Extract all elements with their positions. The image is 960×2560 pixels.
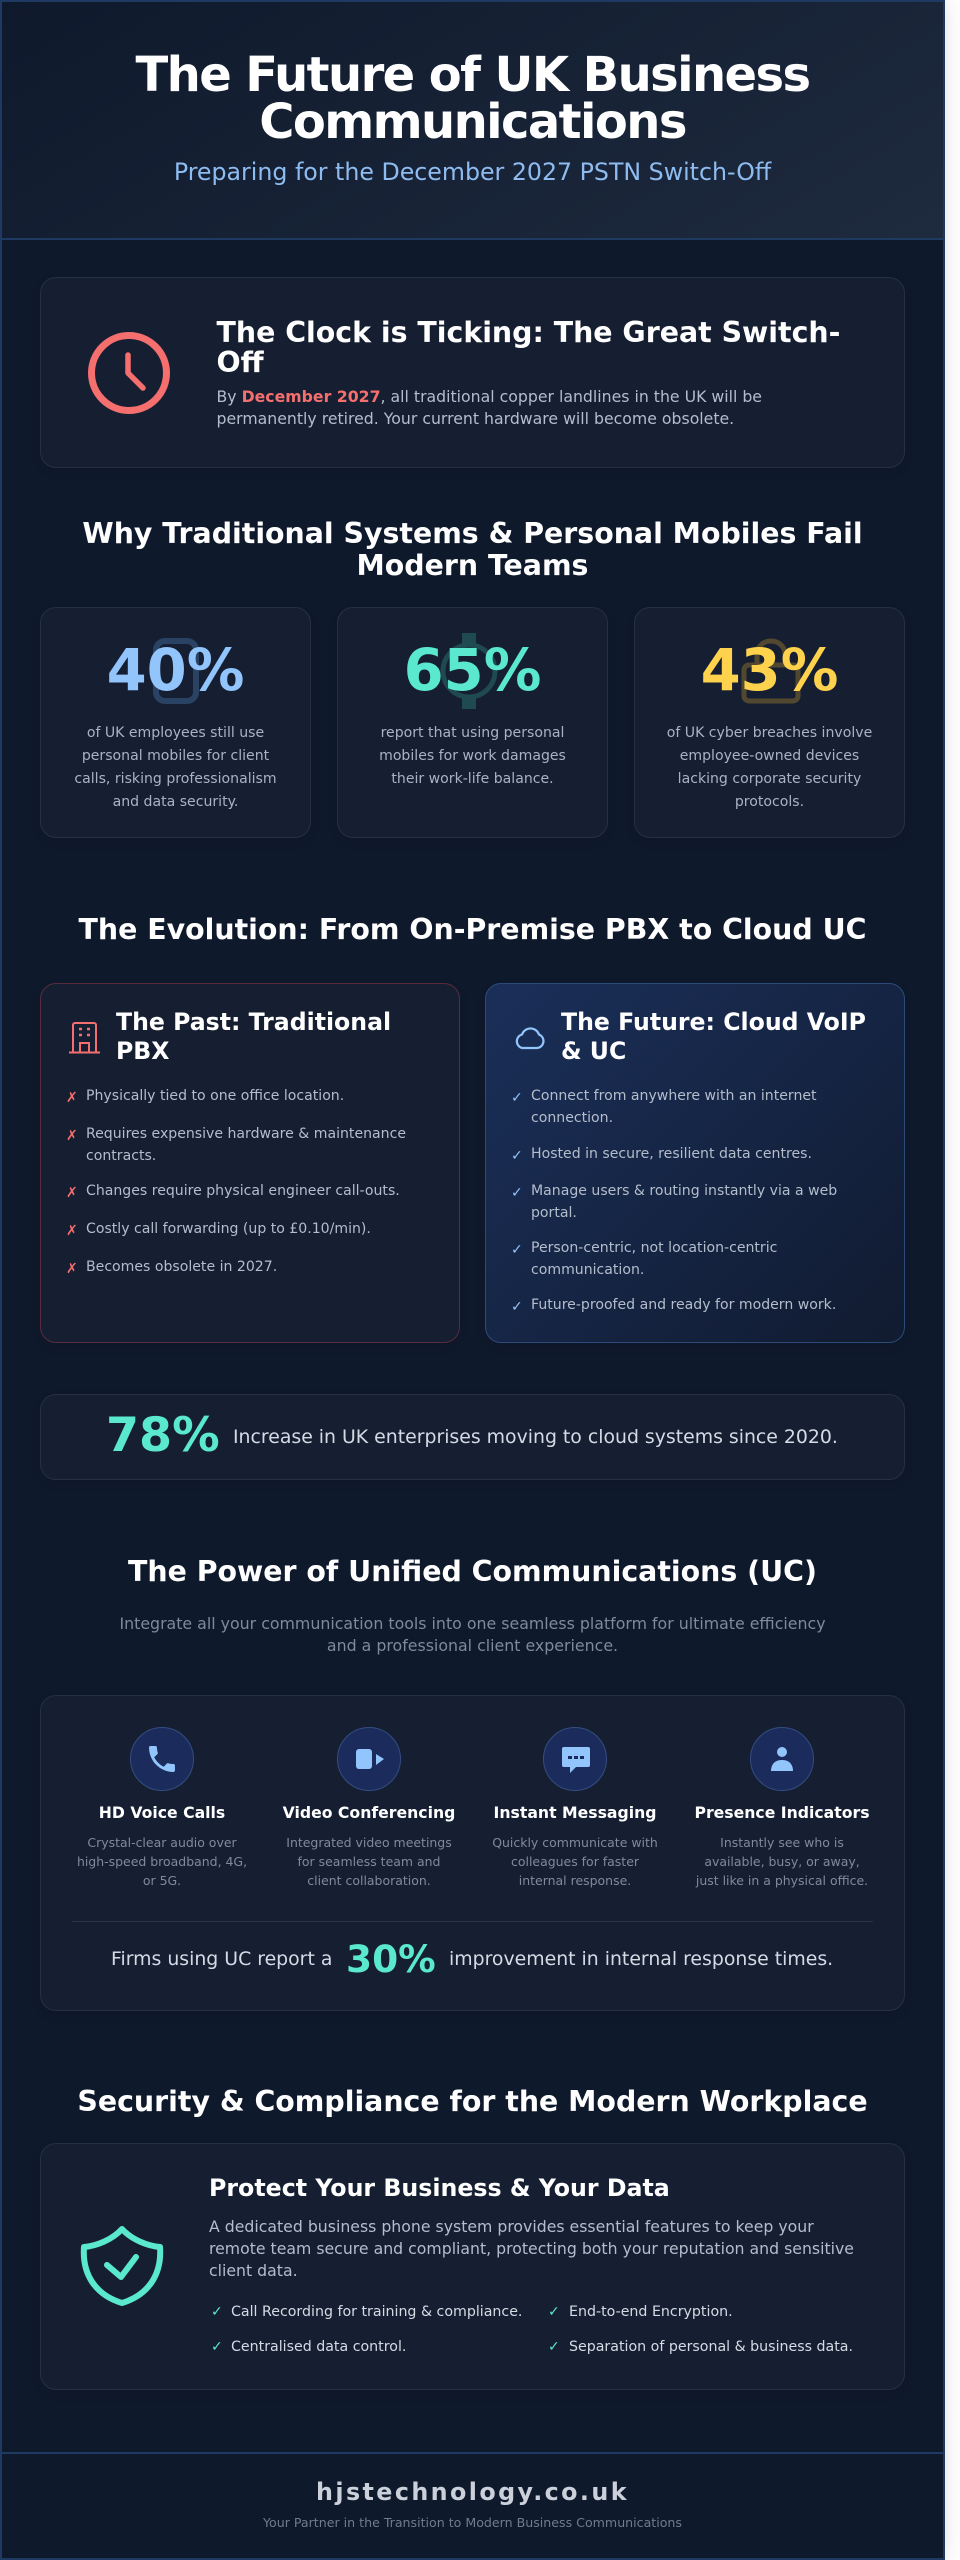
panel: stat 65%: [337, 607, 608, 838]
description: high-speed broadband, 4G,: [77, 1854, 247, 1869]
description: of UK cyber breaches involve: [667, 725, 872, 741]
security checklist: ✓: [548, 2339, 560, 2355]
callout text right: improvement in internal response times.: [449, 1948, 833, 1970]
callout: 30% improvement: [111, 1937, 833, 1981]
intro text: and a professional client experience.: [327, 1636, 618, 1655]
past list: Becomes obsolete in 2027.: [86, 1259, 277, 1275]
security text: [209, 2217, 854, 2280]
panel: the past: [40, 983, 460, 1343]
panel: the future: [485, 983, 905, 1343]
label: Video Conferencing: [283, 1803, 455, 1822]
alert text: By December 2027, all traditional copper landlines in the UK will be: [216, 387, 762, 406]
icon: person: [750, 1727, 814, 1791]
heading: why traditional systems fail: Why Traditional Systems & Personal Mobiles Fail: [82, 517, 863, 550]
icon: chat bubble: [543, 1727, 607, 1791]
panel: stat 43%: [634, 607, 905, 838]
security checklist: Centralised data control.: [231, 2339, 406, 2355]
past list: Costly call forwarding (up to £0.10/min).: [86, 1221, 371, 1237]
panel: security: [40, 2143, 905, 2390]
security text: A dedicated business phone system provides essential features to keep your: [209, 2217, 814, 2236]
security text: client data.: [209, 2261, 298, 2280]
callout text left: Firms using UC report a: [111, 1948, 332, 1970]
icon: cloud: [516, 1027, 545, 1050]
future list: Future-proofed and ready for modern work.: [531, 1297, 836, 1313]
future list: [511, 1088, 837, 1315]
description: personal mobiles for client: [82, 748, 269, 764]
security checklist: Separation of personal & business data.: [569, 2339, 853, 2355]
future list: ✓: [511, 1242, 523, 1258]
future list: connection.: [531, 1110, 613, 1126]
label: Instant Messaging: [494, 1803, 656, 1822]
description: internal response.: [519, 1873, 631, 1888]
number 30%: 30%: [346, 1937, 436, 1981]
item: ✓: [511, 1090, 523, 1106]
icon: target: [440, 633, 498, 709]
future list: ✓: [511, 1148, 523, 1164]
number 43%: 43%: [701, 637, 838, 704]
past list: Physically tied to one office location.: [86, 1088, 344, 1104]
future heading: [561, 1008, 866, 1065]
heading: why traditional systems fail: Modern Teams: [357, 549, 588, 582]
future heading: & UC: [561, 1037, 626, 1065]
security checklist: ✓: [211, 2339, 223, 2355]
alert text: [216, 387, 762, 428]
future list: Hosted in secure, resilient data centres.: [531, 1146, 812, 1162]
title: [136, 47, 809, 150]
number 65%: 65%: [404, 637, 541, 704]
heading: why traditional systems fail: [82, 517, 863, 582]
security checklist: End-to-end Encryption.: [569, 2304, 733, 2320]
future heading: The Future: Cloud VoIP: [561, 1008, 866, 1036]
tagline: Your Partner in the Transition to Modern Business Communications: [263, 2515, 682, 2530]
description: Integrated video meetings: [286, 1835, 452, 1850]
past list: ✗: [66, 1223, 78, 1239]
description: just like in a physical office.: [696, 1873, 868, 1888]
icon: padlock: [742, 638, 800, 704]
description: or 5G.: [143, 1873, 181, 1888]
description: mobiles for work damages: [379, 748, 566, 764]
icon: clock: [88, 332, 170, 414]
description: of UK employees still use: [87, 725, 264, 741]
icon: mobile phone: [153, 638, 199, 704]
alert text: permanently retired. Your current hardware will become obsolete.: [216, 408, 734, 428]
panel: UC features: [40, 1695, 905, 2011]
panel: 78% stat band: [40, 1394, 905, 1480]
past list: Changes require physical engineer call-outs.: [86, 1183, 400, 1199]
header band: [0, 0, 945, 240]
feature: video conferencing: [282, 1727, 455, 1888]
title: The Future of UK Business: [136, 47, 809, 103]
description: colleagues for faster: [511, 1854, 639, 1869]
brand: hjstechnology.co.uk: [316, 2478, 629, 2506]
past heading: The Past: Traditional: [116, 1008, 391, 1036]
description: [74, 725, 277, 810]
description: their work-life balance.: [391, 771, 554, 787]
security text: remote team secure and compliant, protecting both your reputation and sensitive: [209, 2239, 854, 2258]
feature: instant messaging: [492, 1727, 658, 1888]
description: and data security.: [113, 794, 238, 810]
security checklist: [211, 2304, 853, 2355]
item: ✓: [211, 2304, 223, 2320]
feature: presence indicators: [694, 1727, 870, 1888]
number 40%: 40%: [107, 637, 244, 704]
description: calls, risking professionalism: [74, 771, 277, 787]
future list: Connect from anywhere with an internet: [531, 1088, 817, 1104]
future list: Person-centric, not location-centric: [531, 1240, 777, 1256]
security checklist: ✓: [548, 2304, 560, 2320]
description: [696, 1835, 868, 1888]
description: [667, 725, 872, 810]
future list: communication.: [531, 1262, 644, 1278]
icon: video: [337, 1727, 401, 1791]
description: Crystal-clear audio over: [87, 1835, 237, 1850]
alert heading: The Clock is Ticking: The Great Switch-: [216, 316, 840, 349]
intro text: Integrate all your communication tools into one seamless platform for ultimate efficiency: [119, 1614, 826, 1633]
past list: Requires expensive hardware & maintenance: [86, 1126, 406, 1142]
past list: ✗: [66, 1185, 78, 1201]
description: for seamless team and: [298, 1854, 440, 1869]
description: [77, 1835, 247, 1888]
feature: HD voice calls: [77, 1727, 247, 1888]
future list: Manage users & routing instantly via a web: [531, 1183, 837, 1199]
icon: phone: [130, 1727, 194, 1791]
past list: ✗: [66, 1128, 78, 1144]
icon: shield: [80, 2226, 164, 2306]
description: available, busy, or away,: [704, 1854, 860, 1869]
security heading: Protect Your Business & Your Data: [209, 2174, 670, 2202]
description: [492, 1835, 658, 1888]
subtitle: Preparing for the December 2027 PSTN Switch-Off: [174, 158, 771, 186]
panel: stat 40%: [40, 607, 311, 838]
alert heading: Off: [216, 346, 264, 379]
future list: ✓: [511, 1299, 523, 1315]
item: ✗: [66, 1090, 78, 1106]
description: client collaboration.: [307, 1873, 431, 1888]
title: Communications: [259, 94, 686, 150]
icon: building: [69, 1022, 100, 1054]
intro text: [119, 1614, 826, 1655]
description: Instantly see who is: [720, 1835, 844, 1850]
number 78%: 78%: [106, 1408, 220, 1463]
past list: contracts.: [86, 1148, 156, 1164]
description: protocols.: [735, 794, 804, 810]
heading: security: Security & Compliance for the Modern Workplace: [77, 2085, 868, 2118]
stat text: Increase in UK enterprises moving to cloud systems since 2020.: [233, 1426, 838, 1448]
footer: [0, 2452, 945, 2560]
description: report that using personal: [381, 725, 564, 741]
panel: switch-off alert: [40, 277, 905, 468]
description: Quickly communicate with: [492, 1835, 658, 1850]
label: HD Voice Calls: [99, 1803, 225, 1822]
past list: ✗: [66, 1261, 78, 1277]
alert heading: [216, 316, 840, 379]
future list: ✓: [511, 1185, 523, 1201]
description: employee-owned devices: [680, 748, 859, 764]
label: Presence Indicators: [694, 1803, 870, 1822]
description: [379, 725, 566, 787]
future list: portal.: [531, 1205, 577, 1221]
heading: evolution: The Evolution: From On-Premise PBX to Cloud UC: [78, 913, 866, 946]
heading: power of UC: The Power of Unified Communications (UC): [128, 1555, 817, 1588]
past list: [66, 1088, 406, 1277]
description: lacking corporate security: [678, 771, 861, 787]
past heading: PBX: [116, 1037, 169, 1065]
past heading: [116, 1008, 391, 1065]
description: [286, 1835, 452, 1888]
security checklist: Call Recording for training & compliance.: [231, 2304, 522, 2320]
